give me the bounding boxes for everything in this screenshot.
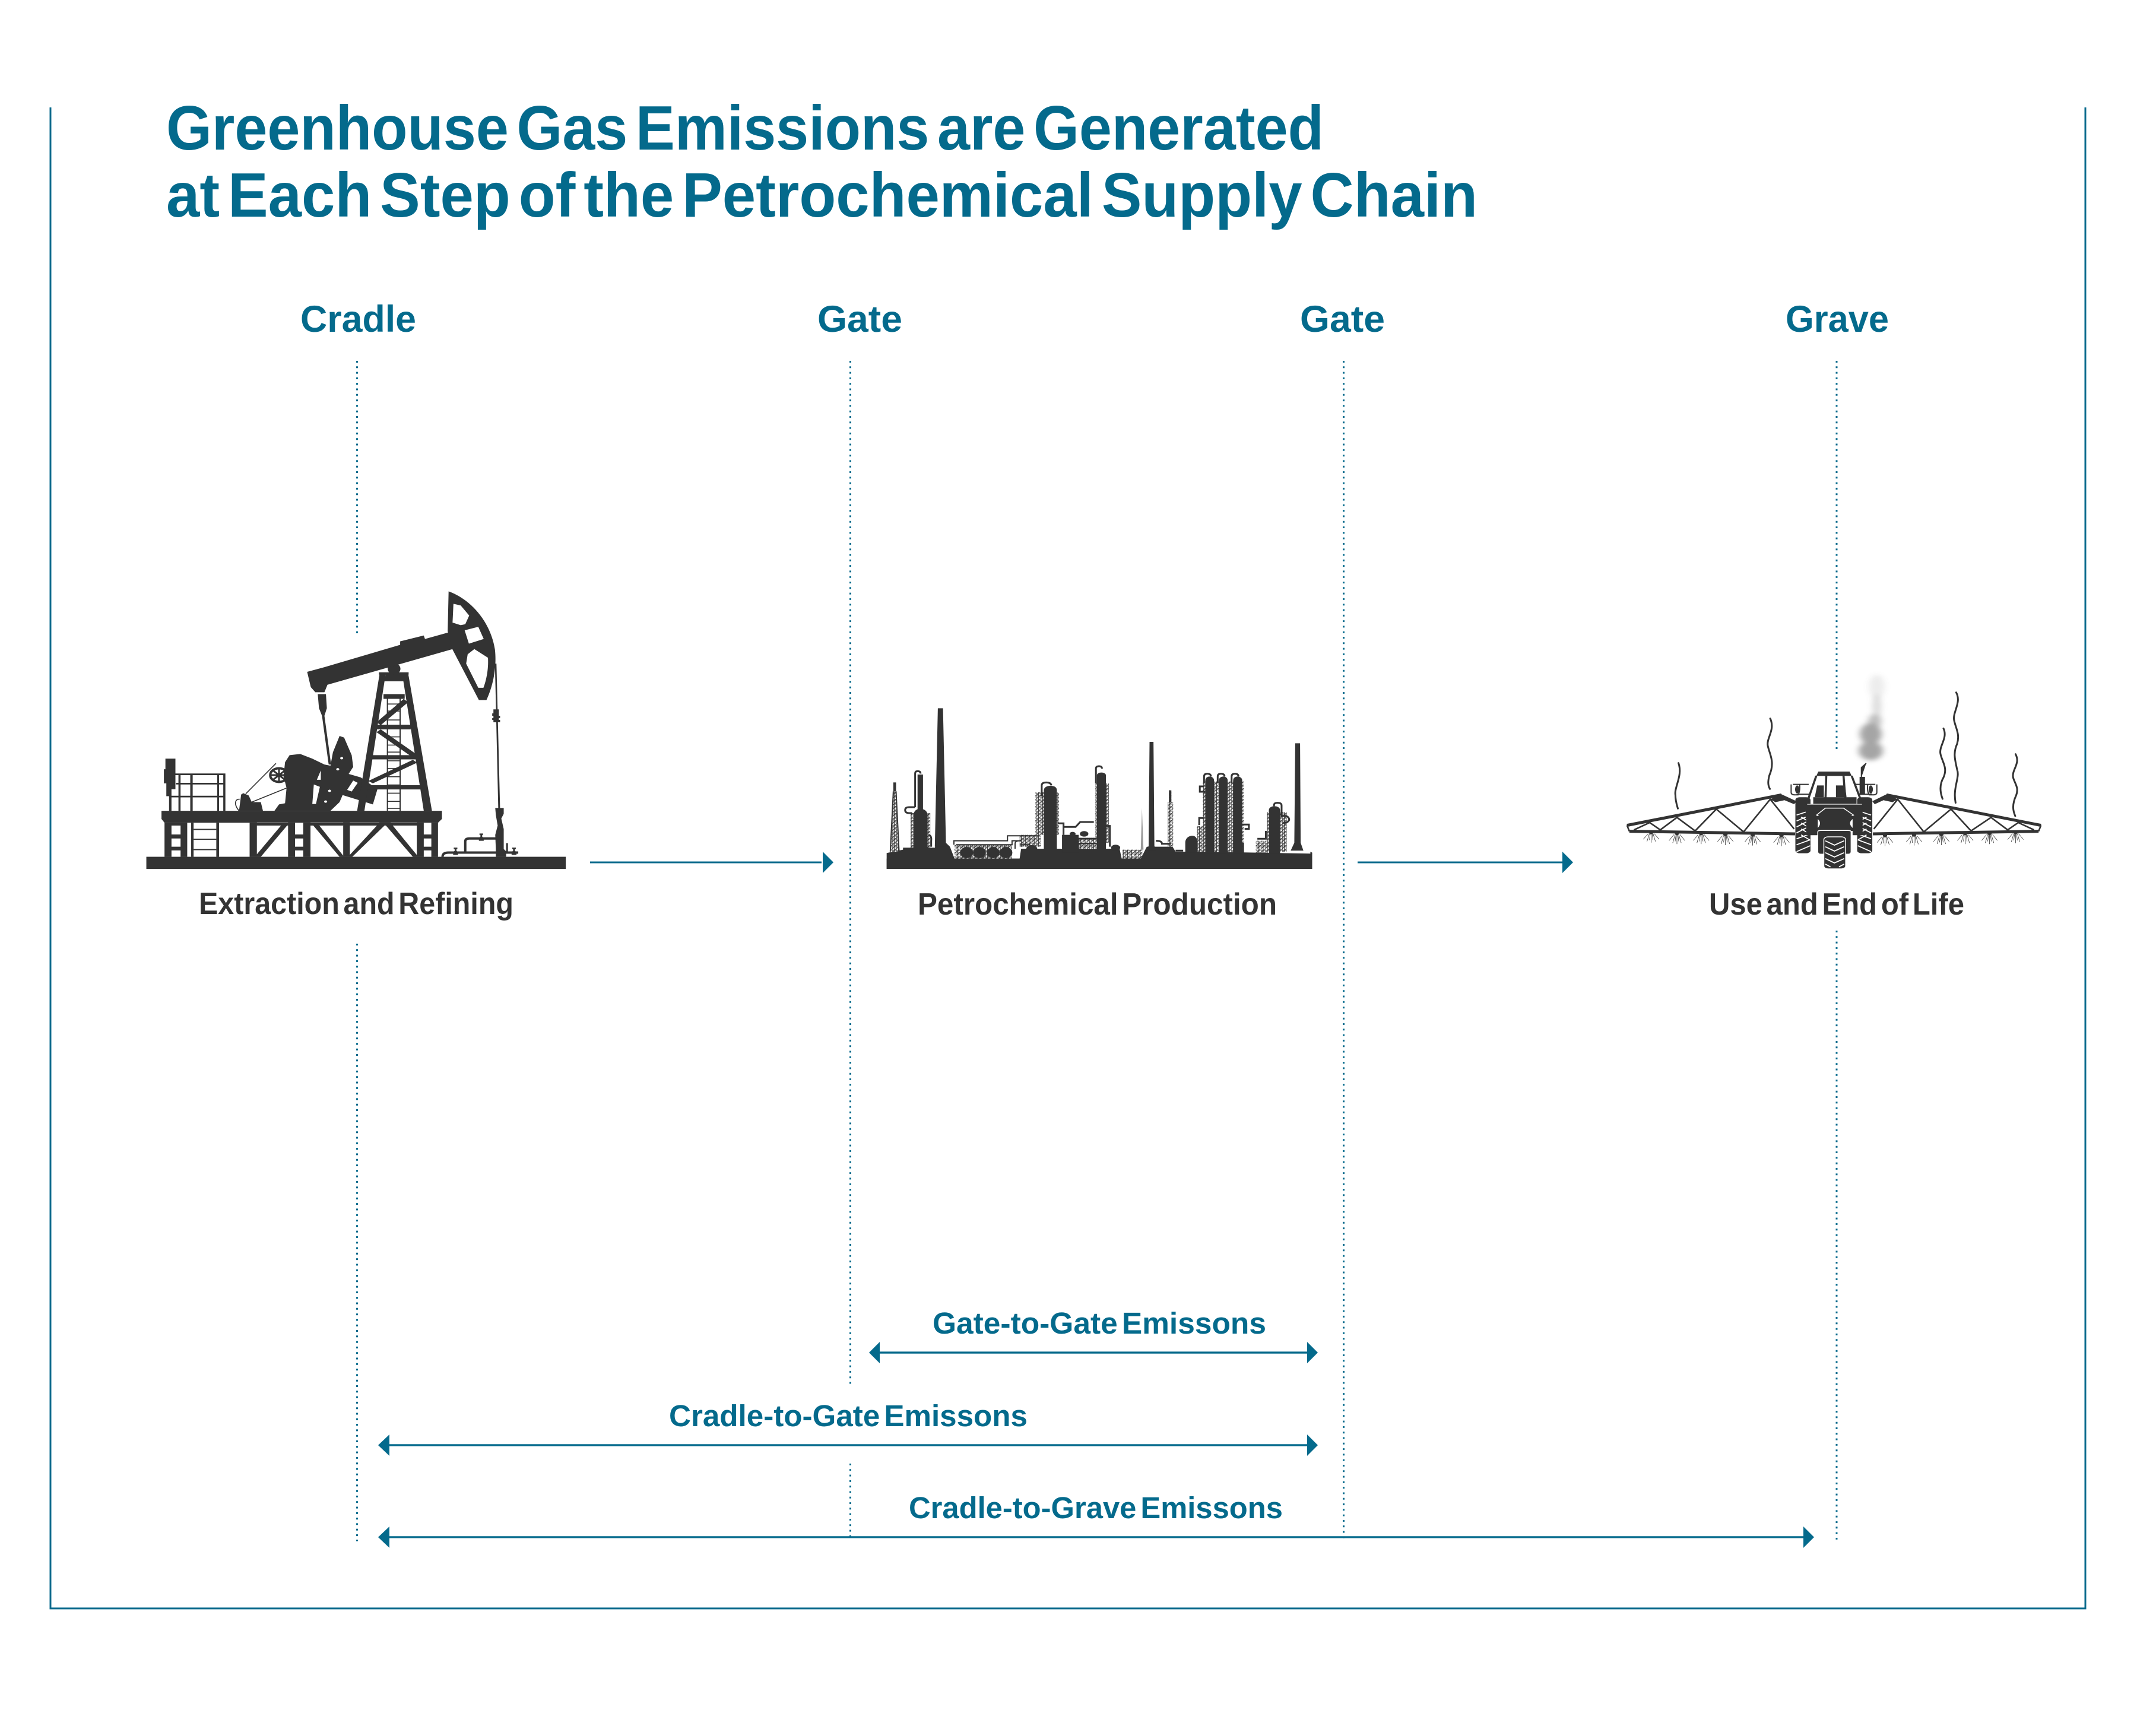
pitman arm xyxy=(318,694,331,764)
central equipment xyxy=(1062,835,1079,853)
ground mass xyxy=(887,842,1312,869)
left box frame xyxy=(170,773,226,811)
dotted guide: first Gate xyxy=(849,361,851,1537)
double arrow: gate to gate xyxy=(869,1342,1318,1363)
stage heading: Grave: Grave xyxy=(1786,299,1889,340)
ladder under deck xyxy=(194,829,216,850)
nozzles xyxy=(1643,831,2024,846)
icon: petrochemical plant xyxy=(887,708,1312,869)
small vessel xyxy=(1185,836,1197,853)
derrick ladder xyxy=(387,699,401,811)
distillation column left xyxy=(914,775,928,849)
bearing xyxy=(388,663,401,674)
walking beam xyxy=(307,630,459,692)
deck legs and braces xyxy=(164,823,438,857)
exhaust xyxy=(1860,763,1866,794)
dotted guide: Grave xyxy=(1835,361,1838,1541)
title: Greenhouse Gas Emissions are Generated xyxy=(166,93,1324,163)
icon: oil pump jack xyxy=(147,591,566,869)
chimney right xyxy=(1291,743,1304,850)
label: Extraction and Refining: Extraction and Refining xyxy=(199,887,513,921)
front tyre xyxy=(1824,837,1846,869)
polished rod and wellhead xyxy=(492,664,500,809)
cab xyxy=(1816,772,1851,776)
horsehead xyxy=(448,591,496,700)
right central column xyxy=(1097,773,1106,849)
double arrow: cradle to grave xyxy=(378,1526,1814,1548)
deck platform xyxy=(161,811,442,823)
storage spheres xyxy=(960,847,973,858)
arrow: extraction to production xyxy=(590,852,833,873)
lattice mast center xyxy=(1168,791,1173,847)
icon: tractor sprayer xyxy=(1627,675,2041,869)
span label: Cradle-to-Grave Emissons: Cradle-to-Grave Emissons xyxy=(909,1491,1283,1525)
stage heading: Cradle: Cradle xyxy=(300,299,416,340)
title xyxy=(166,93,1477,230)
right boom xyxy=(1873,795,2041,834)
central column xyxy=(1044,786,1057,849)
scaffolding xyxy=(911,782,1287,859)
ground slab xyxy=(887,859,1312,869)
title: at Each Step of the Petrochemical Supply Chain xyxy=(166,160,1477,230)
thin flare xyxy=(1141,808,1143,850)
pipe racks xyxy=(954,836,1039,849)
chimney center xyxy=(1147,742,1156,850)
span label: Cradle-to-Gate Emissons: Cradle-to-Gate Emissons xyxy=(669,1399,1028,1433)
stage heading: Gate (first): Gate xyxy=(817,299,902,340)
arrow: production to use xyxy=(1358,852,1573,873)
ground slab xyxy=(147,857,566,869)
gearbox and counterweight xyxy=(274,736,378,811)
engine and belts xyxy=(239,793,263,811)
left cylinder xyxy=(164,758,176,811)
dotted guide: Cradle xyxy=(356,361,358,1541)
small column right xyxy=(1269,806,1280,853)
double arrow: cradle to gate xyxy=(378,1434,1318,1456)
label: Petrochemical Production: Petrochemical Production xyxy=(918,887,1277,922)
left boom xyxy=(1627,795,1795,834)
derrick tower xyxy=(357,672,432,811)
tall chimney left xyxy=(935,708,946,847)
rear tyres xyxy=(1795,797,1811,853)
mirrors and cab arms xyxy=(1791,785,1877,795)
smoke plume xyxy=(1859,675,1885,760)
dotted guide: second Gate xyxy=(1343,361,1345,1541)
label: Use and End of Life: Use and End of Life xyxy=(1709,887,1964,922)
heat waves xyxy=(1675,693,2017,816)
triple columns xyxy=(1205,776,1242,853)
span label: Gate-to-Gate Emissons: Gate-to-Gate Emissons xyxy=(933,1306,1266,1340)
tractor body xyxy=(1806,805,1863,835)
stage heading: Gate (second): Gate xyxy=(1300,299,1385,340)
lattice tower left xyxy=(891,791,899,852)
